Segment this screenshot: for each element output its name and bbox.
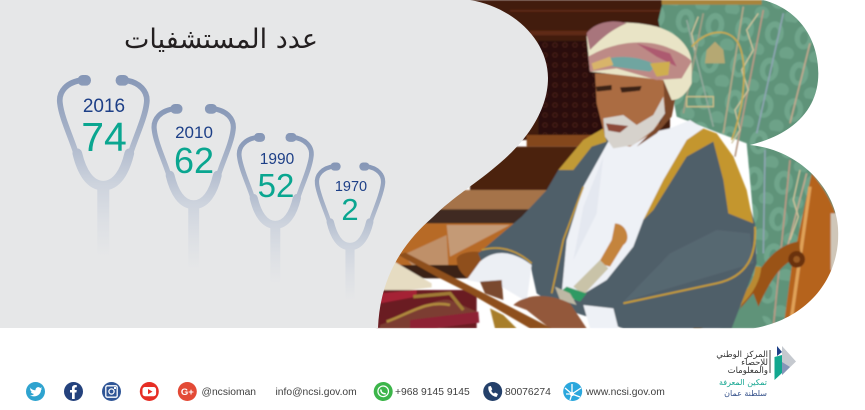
stethoscope: 2010: 62	[174, 140, 214, 181]
logo tagline: تمكين المعرفة	[719, 378, 767, 387]
stethoscope: 2016	[60, 75, 147, 257]
forearm	[480, 280, 503, 300]
gold trim	[558, 128, 607, 170]
icon: google plus: G+	[181, 387, 194, 398]
logo country: سلطنة عمان	[724, 389, 767, 398]
stethoscope: 1990: 1990	[260, 151, 295, 168]
logo name	[716, 350, 768, 376]
icon: phone	[483, 382, 502, 401]
logo mark	[774, 346, 796, 380]
sleeve	[467, 253, 532, 302]
white robe	[562, 120, 703, 300]
chair wood	[784, 174, 836, 319]
text: whatsapp number: +968 9145 9145	[395, 387, 470, 398]
stethoscope: 1970	[317, 162, 383, 301]
title: عدد المستشفيات	[124, 24, 318, 55]
stethoscope: 2016: 2016	[83, 96, 125, 117]
icon: instagram	[102, 382, 121, 401]
icon: youtube	[140, 382, 159, 401]
stethoscope: 1970: 2	[341, 192, 359, 227]
floor	[440, 189, 548, 210]
desk edge	[398, 252, 552, 328]
text: social handle: @ncsioman	[202, 387, 256, 398]
stethoscope: 2016: 74	[81, 114, 127, 160]
cloak	[478, 128, 757, 328]
face	[595, 73, 665, 147]
icon: whatsapp	[374, 382, 393, 401]
icon: google plus	[178, 382, 197, 401]
logo name: للإحصاء	[741, 358, 768, 368]
hand	[513, 296, 587, 328]
icon: globe	[563, 382, 582, 401]
stethoscope: 1990	[239, 133, 311, 284]
text: email: info@ncsi.gov.om	[276, 387, 357, 398]
photo: seated figure in chair	[370, 0, 841, 328]
desk top	[377, 290, 477, 328]
logo name: المركز الوطني	[716, 350, 768, 360]
text: website: www.ncsi.gov.om	[585, 387, 665, 398]
stethoscope: 1990: 52	[258, 167, 294, 204]
stethoscope: 2010: 2010	[175, 123, 213, 142]
panel: grey background	[0, 0, 548, 328]
far chair arm	[457, 252, 483, 280]
turban	[587, 23, 692, 100]
text: phone number: 80076274	[505, 387, 551, 398]
icon: twitter	[26, 382, 45, 401]
logo	[716, 346, 796, 398]
lattice panel	[538, 41, 603, 136]
papers	[384, 261, 432, 292]
stethoscope: 2010	[154, 104, 233, 269]
dagger	[598, 223, 627, 267]
near cuff	[583, 305, 618, 328]
icon: facebook	[64, 382, 83, 401]
logo name: والمعلومات	[728, 366, 768, 376]
chair back	[658, 0, 837, 328]
stethoscope: 1970: 1970	[335, 179, 367, 195]
wood wall	[470, 0, 672, 142]
